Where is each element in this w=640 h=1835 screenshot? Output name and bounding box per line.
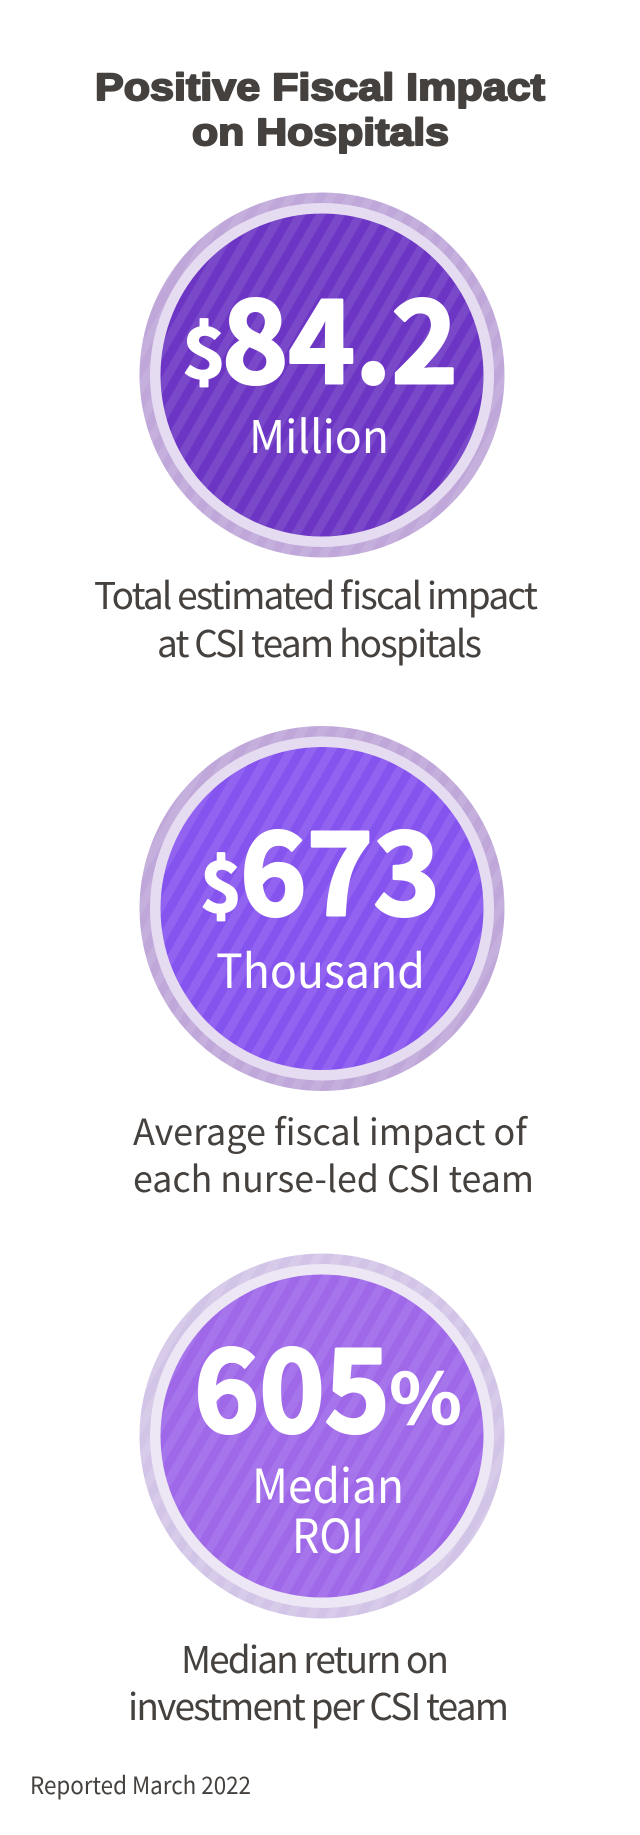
title: on Hospitals xyxy=(192,112,449,154)
caption: average fiscal impact xyxy=(133,1104,534,1203)
circle badge: 605% Median ROI: 605 xyxy=(194,1300,390,1466)
caption: total estimated fiscal impact: at CSI team hospitals xyxy=(157,614,482,668)
footnote: report date: Reported March 2022 xyxy=(30,1766,251,1801)
caption: median return on investment: investment per CSI team xyxy=(128,1677,509,1731)
caption: total estimated fiscal impact: Total estimated fiscal impact xyxy=(94,566,538,620)
circle badge: $84.2 Million: 84.2 xyxy=(222,251,458,417)
caption: average fiscal impact: Average fiscal impact of xyxy=(133,1104,528,1156)
circle badge: 605% Median ROI: ROI xyxy=(292,1498,364,1567)
panel: total fiscal impact xyxy=(94,192,538,668)
circle badge: $673 Thousand: 673 xyxy=(240,783,440,949)
circle badge: $84.2 Million xyxy=(140,192,504,558)
circle badge: $673 Thousand: Thousand xyxy=(216,933,425,1002)
circle badge: 605% Median ROI: % xyxy=(389,1344,462,1445)
panel: median ROI xyxy=(128,1254,509,1731)
caption: median return on investment xyxy=(128,1630,509,1731)
caption: total estimated fiscal impact xyxy=(94,566,538,668)
panel: average fiscal impact xyxy=(133,726,534,1203)
caption: average fiscal impact: each nurse-led CSI team xyxy=(133,1151,534,1203)
title: Positive Fiscal Impact xyxy=(95,67,545,109)
title xyxy=(95,67,545,154)
caption: median return on investment: Median return on xyxy=(181,1630,449,1684)
circle badge: $84.2 Million: $ xyxy=(182,298,226,399)
circle badge: 605% Median ROI xyxy=(140,1254,504,1618)
circle badge: $84.2 Million: Million xyxy=(249,401,389,466)
circle badge: $673 Thousand xyxy=(140,726,504,1091)
circle badge: $673 Thousand: $ xyxy=(200,832,242,933)
circle badge: 605% Median ROI: Median xyxy=(252,1448,404,1517)
